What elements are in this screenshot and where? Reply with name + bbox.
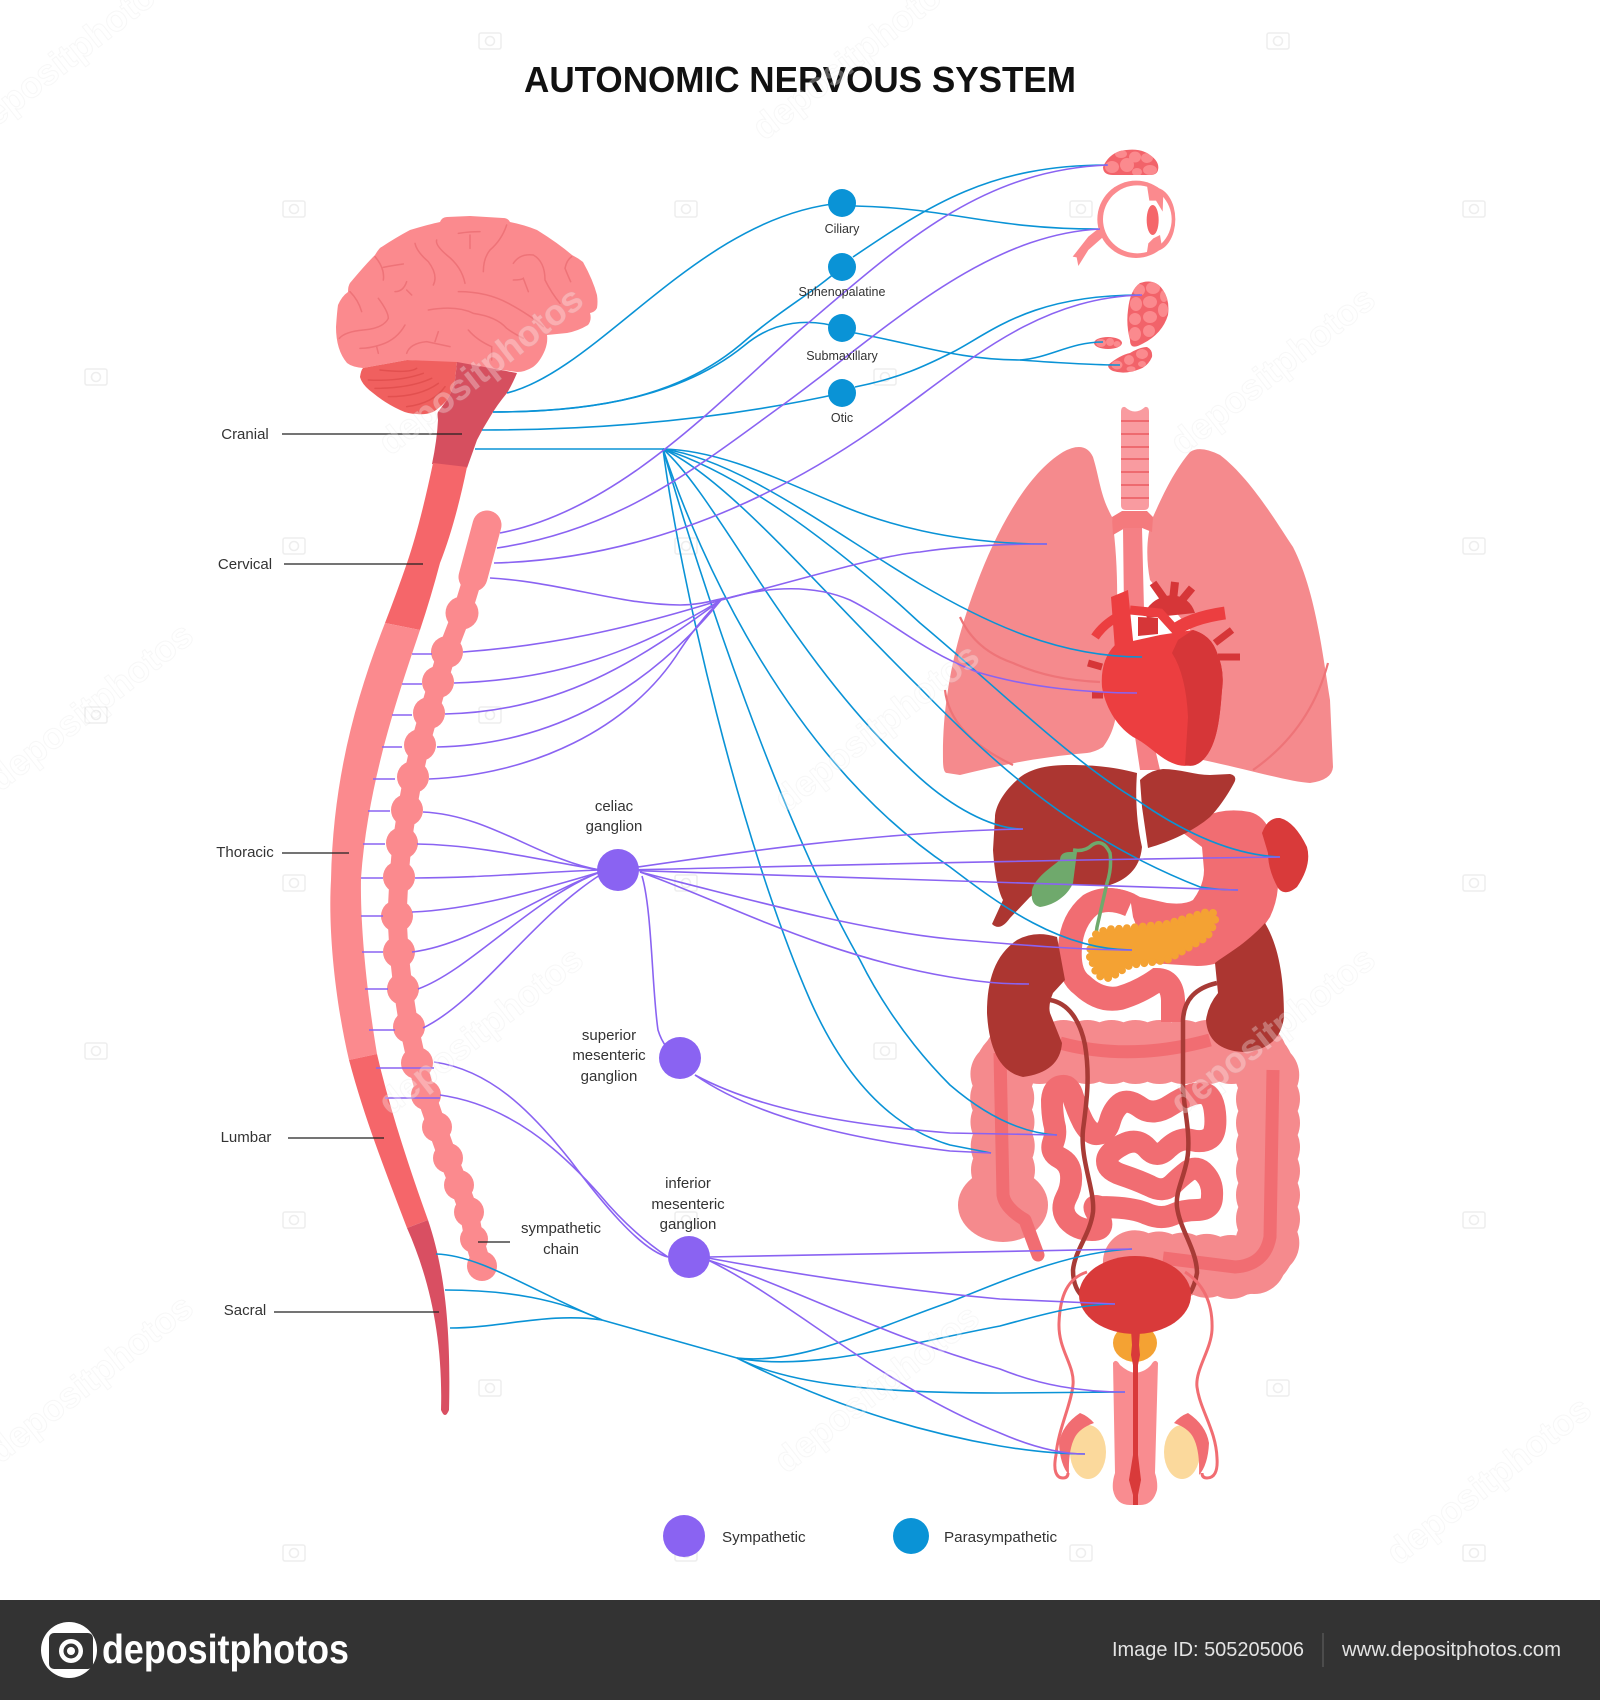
ganglion: Ciliary <box>825 189 860 236</box>
left lung <box>943 447 1118 775</box>
bladder <box>1079 1256 1191 1334</box>
sympathetic chain <box>381 525 497 1281</box>
legend <box>663 1515 1058 1557</box>
vessels <box>1095 610 1180 637</box>
legend: Sympathetic: Sympathetic <box>722 1529 806 1546</box>
kidneys <box>987 923 1284 1077</box>
superior mesenteric ganglion <box>572 1027 701 1085</box>
celiac ganglion: celiac <box>595 798 634 815</box>
pancreas <box>1090 912 1216 978</box>
thoracic segment <box>330 623 420 1060</box>
liver <box>992 765 1235 927</box>
watermarks: depositphotos <box>1378 1388 1599 1573</box>
watermark camera icons <box>85 33 1485 1561</box>
left testis <box>1070 1425 1106 1479</box>
cranial ganglia <box>799 189 885 425</box>
label: Cervical: Cervical <box>218 556 272 573</box>
inferior mesenteric ganglion: inferior <box>665 1175 711 1192</box>
stomach <box>1107 810 1278 966</box>
ganglion: Otic <box>828 379 856 425</box>
label: Lumbar: Lumbar <box>221 1129 271 1146</box>
legend: Sympathetic <box>663 1515 806 1557</box>
footer logo text: depositphotos <box>102 1626 349 1672</box>
lungs <box>943 447 1333 783</box>
watermarks: depositphotos <box>370 278 591 463</box>
epididymis <box>1059 1413 1209 1475</box>
label: sympathetic chain: chain <box>543 1241 579 1258</box>
male reproductive system <box>1055 1256 1217 1505</box>
spinal cord <box>330 362 517 1415</box>
label: Sacral: Sacral <box>224 1302 266 1319</box>
brainstem <box>432 362 517 468</box>
ganglion: Sphenopalatine <box>799 253 885 299</box>
cerebellum <box>360 360 457 414</box>
label: Thoracic <box>216 844 349 861</box>
gallbladder <box>1032 843 1111 952</box>
legend: Parasympathetic <box>893 1518 1058 1554</box>
prostate <box>1113 1324 1157 1362</box>
heart right side <box>1172 630 1223 766</box>
title: AUTONOMIC NERVOUS SYSTEM <box>524 59 1076 100</box>
inferior mesenteric ganglion: ganglion <box>660 1216 716 1233</box>
appendix <box>1025 1220 1038 1255</box>
lumbar segment <box>349 1054 428 1228</box>
inferior mesenteric ganglion <box>651 1175 725 1278</box>
parotid gland <box>1127 282 1168 347</box>
brain <box>336 216 598 414</box>
pulmonary veins <box>1088 630 1240 695</box>
ganglion: Ciliary: Ciliary <box>825 222 860 236</box>
ureters <box>1050 983 1217 1297</box>
label: Cranial: Cranial <box>221 426 269 443</box>
label: Thoracic: Thoracic <box>216 844 274 861</box>
image id: Image ID: 505205006 <box>1112 1639 1304 1661</box>
ganglion: Submaxillary: Submaxillary <box>806 349 879 363</box>
ganglion: Submaxillary <box>806 314 879 363</box>
eye <box>1073 181 1175 266</box>
sacral segment <box>407 1220 449 1415</box>
urethra <box>1129 1330 1141 1505</box>
submandibular gland <box>1108 347 1152 373</box>
salivary glands <box>1094 282 1168 373</box>
superior mesenteric ganglion: mesenteric <box>572 1047 646 1064</box>
right testis <box>1164 1425 1200 1479</box>
left atrium <box>1138 617 1158 636</box>
label: sympathetic chain <box>478 1220 602 1258</box>
aortic arch <box>1145 595 1195 618</box>
vas deferens <box>1055 1272 1217 1478</box>
celiac ganglion <box>586 798 642 891</box>
spleen <box>1262 818 1308 892</box>
watermarks: depositphotos <box>1162 278 1383 463</box>
cervical segment <box>385 463 467 630</box>
watermarks: depositphotos <box>766 635 987 820</box>
footer bar <box>0 1600 1600 1700</box>
watermarks: depositphotos <box>370 938 591 1123</box>
cerebrum <box>336 216 598 372</box>
penis <box>1113 1361 1158 1505</box>
footer logo icon <box>41 1622 97 1678</box>
legend: Parasympathetic: Parasympathetic <box>944 1529 1058 1546</box>
watermarks: depositphotos <box>766 1296 987 1481</box>
label: sympathetic chain: sympathetic <box>521 1220 602 1237</box>
parasympathetic nerves <box>436 165 1280 1454</box>
website: www.depositphotos.com <box>1341 1639 1561 1661</box>
lacrimal gland <box>1103 150 1158 176</box>
trachea <box>1112 407 1153 535</box>
ganglion: Otic: Otic <box>831 411 853 425</box>
colon band <box>1000 1040 1273 1267</box>
sublingual gland <box>1094 337 1122 349</box>
small intestine <box>1052 1086 1215 1230</box>
duodenum <box>1070 900 1173 1022</box>
esophagus <box>1123 528 1160 770</box>
celiac ganglion: ganglion <box>586 818 642 835</box>
sympathetic nerves <box>361 165 1280 1454</box>
inferior mesenteric ganglion: mesenteric <box>651 1196 725 1213</box>
vena cava <box>1111 590 1134 650</box>
colon <box>958 1040 1273 1267</box>
watermarks: depositphotos <box>1162 938 1383 1123</box>
ganglion: Sphenopalatine: Sphenopalatine <box>799 285 885 299</box>
superior mesenteric ganglion: ganglion <box>581 1068 637 1085</box>
heart body <box>1102 630 1223 766</box>
heart <box>1088 582 1240 766</box>
right lung <box>1147 449 1333 783</box>
lung fissures <box>945 617 1328 770</box>
brain folds <box>339 225 572 407</box>
superior mesenteric ganglion: superior <box>582 1027 636 1044</box>
cecum <box>958 1168 1048 1242</box>
